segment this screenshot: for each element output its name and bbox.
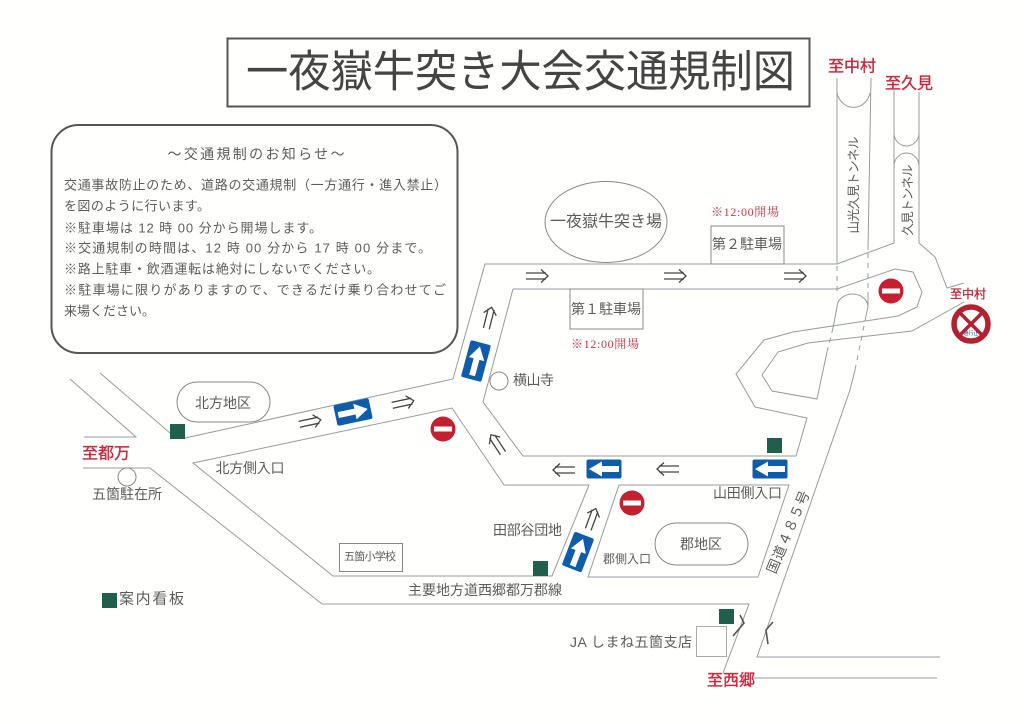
destination: Tsuma: 至都万 [82,444,130,462]
JA branch [570,626,726,656]
panel: traffic notice [52,125,458,353]
notice body text: 交通事故防止のため、道路の交通規制（一方通行・進入禁止） [64,178,447,192]
parking lot 1: 第１駐車場 [571,301,641,317]
notice heading: ～交通規制のお知らせ～ [168,146,344,162]
notice body text: ※駐車場は 12 時 00 分から開場します。 [64,220,322,236]
notice body text: ※駐車場に限りがありますので、できるだけ乗り合わせてご [64,282,446,298]
area: Kori: 郡地区 [680,536,722,552]
notice body text [64,178,447,318]
police box: 五箇駐在所 [92,486,162,502]
one-way sign: north slope [461,340,491,382]
one-way sign: central road [586,460,622,478]
no traffic sign: 通行止 [963,330,979,337]
notice body text: 来場ください。 [64,304,155,318]
parking lot 1 opening time: ※12:00開場 [571,336,639,351]
temple: 横山寺 [513,372,554,388]
JA branch: JA しまね五箇支店 [570,634,692,650]
no entry sign: tunnel junction [878,278,904,304]
one-way sign: Yamada entrance [752,460,788,478]
parking lot 2 opening time: ※12:00開場 [711,204,779,219]
parking lot 2 [711,226,784,264]
notice body text: を図のように行います。 [64,198,210,214]
legend: guide sign: 案内看板 [119,590,184,608]
label: Yamada entrance: 山田側入口 [713,485,782,501]
destination: Nakamura north: 至中村 [828,58,876,76]
destination: Saigo: 至西郷 [707,672,755,690]
police box [92,468,162,502]
area: Kori [655,523,748,565]
guide sign markers [170,424,782,624]
direction arrows along one-way route [298,270,806,532]
venue: bullfighting ground: 一夜嶽牛突き場 [550,212,662,230]
label: Kori entrance: 郡側入口 [603,552,651,566]
label: Route 485: 国道４８５号 [763,488,813,576]
school [340,544,402,572]
no entry sign: Kitagata [430,416,456,442]
parking lot 2: 第２駐車場 [712,236,782,252]
bridge marks [733,615,773,644]
title [228,38,810,106]
destination: Nakamura east: 至中村 [950,286,986,301]
label: Kitagata entrance: 北方側入口 [216,460,284,476]
notice body text: ※交通規制の時間は、12 時 00 分から 17 時 00 分まで。 [64,240,431,256]
one-way sign: Kitagata road [333,398,373,426]
label: Yamamitsu-Kumi tunnel: 山光久見トンネル [847,136,861,234]
area: Kitagata: 北方地区 [195,395,251,411]
parking lot 1 [570,289,643,329]
label: main prefectural road: 主要地方道西郷都万郡線 [408,582,562,598]
no entry sign: Kori [620,490,644,516]
label: Kumi tunnel: 久見トンネル [901,164,915,236]
no traffic sign [954,307,988,341]
one-way sign: Tabedani road [562,531,594,573]
temple [490,372,554,390]
label: Tabedani housing: 田部谷団地 [493,522,562,538]
venue: bullfighting ground [545,182,667,262]
area: Kitagata [177,382,270,422]
road network map [70,78,964,678]
notice body text: ※路上駐車・飲酒運転は絶対にしないでください。 [64,262,380,276]
school: 五箇小学校 [344,549,396,563]
title: 一夜嶽牛突き大会交通規制図 [246,48,795,96]
destination: Kumi: 至久見 [885,74,933,92]
